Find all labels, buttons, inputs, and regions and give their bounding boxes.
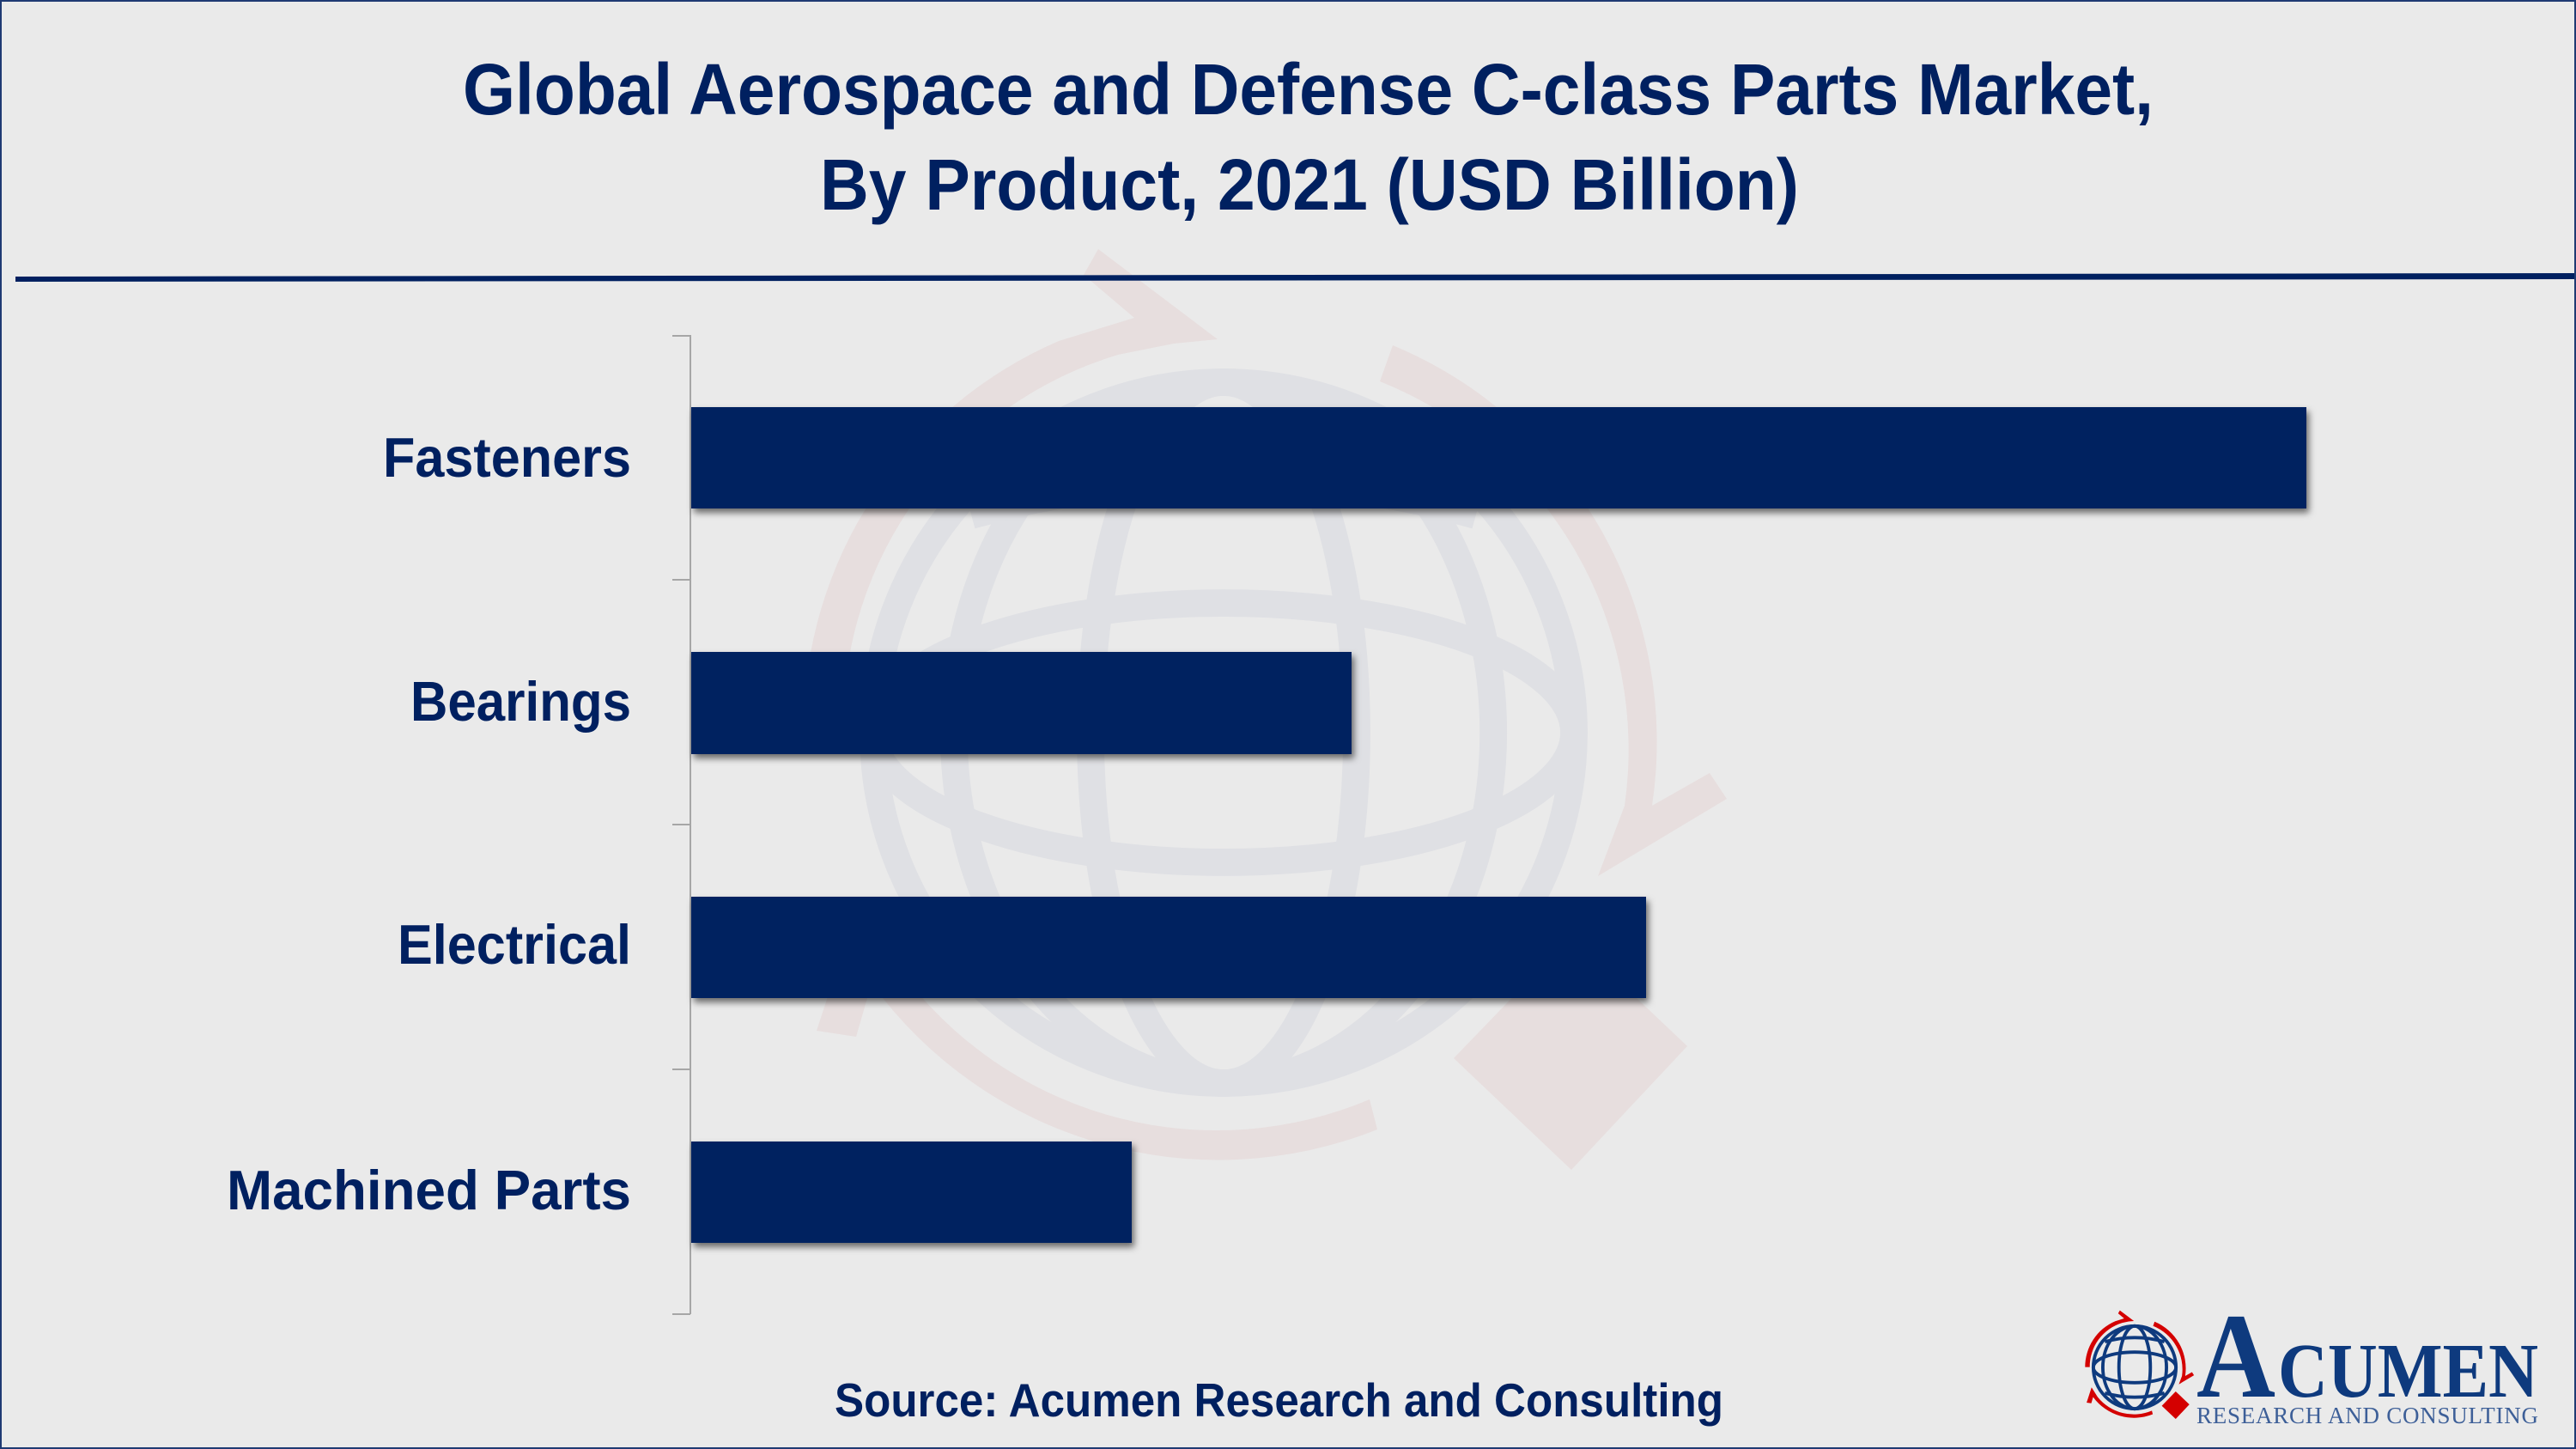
wordmark: A: [2196, 1289, 2275, 1423]
source note: Source: Acumen Research and Consulting: [835, 1373, 1723, 1427]
bar: Bearings: [691, 652, 1352, 754]
bar chart: [691, 407, 2306, 1243]
category labels: Electrical: [398, 913, 631, 976]
bar: Fasteners: [691, 407, 2306, 508]
wordmark: [2196, 1289, 2538, 1428]
category labels: [227, 426, 631, 1221]
title: [463, 49, 2154, 225]
bar: Electrical: [691, 897, 1646, 998]
logo: Acumen Research and Consulting: [2085, 1289, 2538, 1428]
title divider line: [15, 273, 2576, 282]
title: Global Aerospace and Defense C-class Parts Market,: [463, 49, 2154, 130]
title: By Product, 2021 (USD Billion): [820, 144, 1799, 225]
wordmark: RESEARCH AND CONSULTING: [2196, 1403, 2538, 1428]
watermark: Acumen globe emblem: [804, 249, 1727, 1170]
category labels: Fasteners: [383, 426, 631, 489]
category labels: Machined Parts: [227, 1159, 631, 1221]
icon: globe with arrows: [2085, 1311, 2194, 1419]
bar: Machined Parts: [691, 1142, 1132, 1243]
category axis: [672, 335, 690, 1314]
category labels: Bearings: [410, 670, 631, 733]
wordmark: CUMEN: [2278, 1329, 2538, 1414]
